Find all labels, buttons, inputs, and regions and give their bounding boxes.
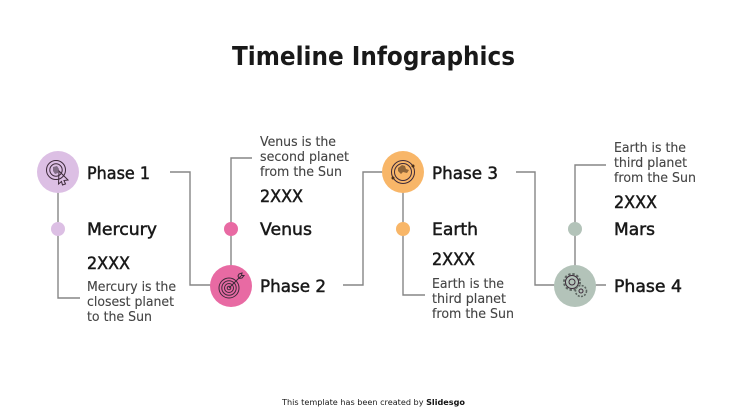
panel: phase 1 mercury <box>37 151 176 325</box>
stem: mercury <box>58 172 80 298</box>
heading: phase 4: Phase 4 <box>614 277 682 297</box>
dot: mars <box>568 222 582 236</box>
description: mercury: Mercury is the <box>87 280 176 295</box>
description: venus <box>260 135 349 180</box>
date: earth: 2XXX <box>432 250 475 270</box>
footer credit: This template has been created by Slidesgo <box>281 398 466 407</box>
date: venus: 2XXX <box>260 187 303 207</box>
label: earth: Earth <box>432 220 478 240</box>
description: mars: from the Sun <box>614 171 696 186</box>
description: earth: from the Sun <box>432 307 514 322</box>
panel: phase 3 earth <box>382 151 514 322</box>
icon: cursor on planet <box>37 151 79 193</box>
description: mercury: closest planet <box>87 295 174 310</box>
description: venus: from the Sun <box>260 165 342 180</box>
description: mars: Earth is the <box>614 141 686 156</box>
date: mars: 2XXX <box>614 193 657 213</box>
label: mercury: Mercury <box>87 220 157 240</box>
description: venus: second planet <box>260 150 349 165</box>
label: venus: Venus <box>260 220 312 240</box>
heading: phase 1: Phase 1 <box>87 164 150 184</box>
description: mars: third planet <box>614 156 687 171</box>
date: mercury: 2XXX <box>87 254 130 274</box>
connector: phase 2 to phase 3 <box>343 172 403 285</box>
stem: mars <box>575 165 606 286</box>
dot: earth <box>396 222 410 236</box>
panel: phase 2 venus <box>210 135 349 307</box>
description: earth: third planet <box>432 292 506 307</box>
connector: phase 1 to phase 2 <box>170 172 231 285</box>
icon: target with arrow <box>210 265 252 307</box>
description: mars <box>614 141 696 186</box>
heading: phase 2: Phase 2 <box>260 277 326 297</box>
icon: earth with orbit <box>382 151 424 193</box>
label: mars: Mars <box>614 220 655 240</box>
panel: phase 4 mars <box>554 141 696 307</box>
stem: earth <box>403 172 425 295</box>
dot: venus <box>224 222 238 236</box>
icon: gears <box>554 265 596 307</box>
connector: phase 3 to phase 4 <box>516 172 575 285</box>
title: Timeline Infographics <box>232 42 515 72</box>
description: venus: Venus is the <box>260 135 336 150</box>
stem: venus <box>231 158 252 286</box>
heading: phase 3: Phase 3 <box>432 164 498 184</box>
description: mercury <box>87 280 176 325</box>
description: earth: Earth is the <box>432 277 504 292</box>
dot: mercury <box>51 222 65 236</box>
description: earth <box>432 277 514 322</box>
description: mercury: to the Sun <box>87 310 152 325</box>
